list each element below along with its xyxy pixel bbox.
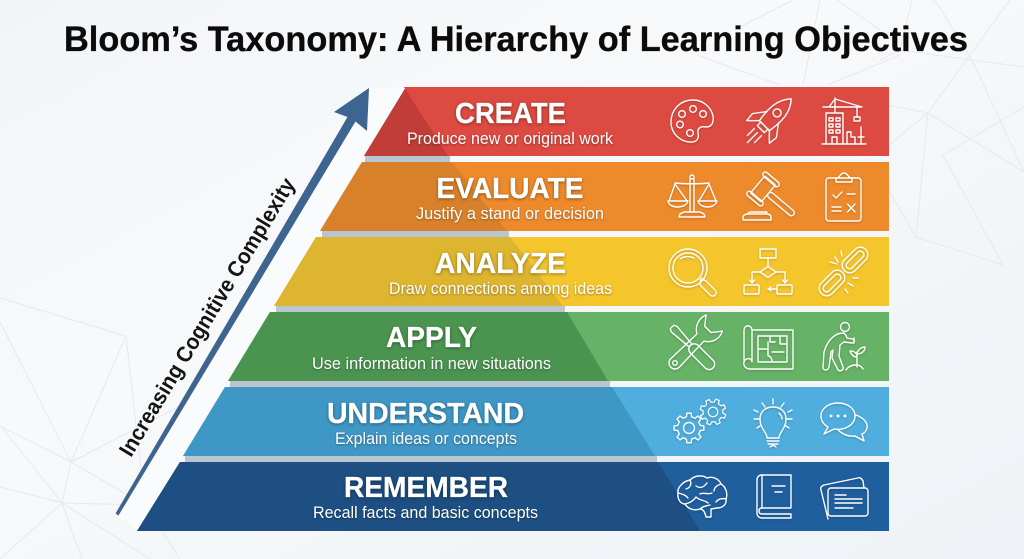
title: Bloom’s Taxonomy: A Hierarchy of Learning Objectives — [64, 19, 968, 59]
heading: analyze: ANALYZE — [435, 248, 566, 280]
arrow: increasing complexity — [116, 88, 369, 516]
heading: understand: UNDERSTAND — [327, 398, 524, 430]
description: analyze: Draw connections among ideas — [389, 279, 612, 298]
axis label: Increasing Cognitive Complexity — [114, 173, 300, 461]
icon: brain — [678, 476, 727, 517]
icon: gavel — [743, 171, 803, 226]
icon: clipboard — [826, 173, 861, 221]
heading: evaluate: EVALUATE — [436, 173, 584, 205]
description: understand: Explain ideas or concepts — [335, 429, 517, 448]
icon: book — [757, 475, 791, 518]
heading: create: CREATE — [455, 98, 566, 130]
icon: scales — [668, 175, 717, 217]
icon: rocket — [735, 87, 803, 155]
icon: gears — [674, 395, 730, 443]
icon: tools — [661, 314, 724, 376]
icon: broken chain — [816, 244, 871, 299]
level: remember — [137, 462, 889, 531]
icon: gardener — [823, 322, 865, 371]
icon: palette — [671, 100, 713, 142]
description: remember: Recall facts and basic concepts — [313, 503, 538, 522]
icon: flowchart — [744, 249, 792, 294]
description: apply: Use information in new situations — [312, 354, 551, 373]
description: create: Produce new or original work — [407, 129, 613, 148]
description: evaluate: Justify a stand or decision — [416, 204, 604, 223]
heading: remember: REMEMBER — [344, 472, 508, 504]
heading: apply: APPLY — [386, 322, 477, 354]
level: analyze — [274, 237, 889, 312]
icon: light bulb — [754, 399, 792, 447]
level: evaluate — [320, 162, 889, 237]
icon: speech bubbles — [821, 403, 867, 441]
icon: note cards — [821, 478, 868, 519]
icon: building under construction — [822, 98, 866, 144]
level: create — [364, 87, 889, 162]
icon: blueprint — [744, 326, 793, 369]
level: understand — [183, 387, 889, 462]
icon: magnifier — [669, 249, 718, 298]
level: apply — [228, 312, 889, 387]
